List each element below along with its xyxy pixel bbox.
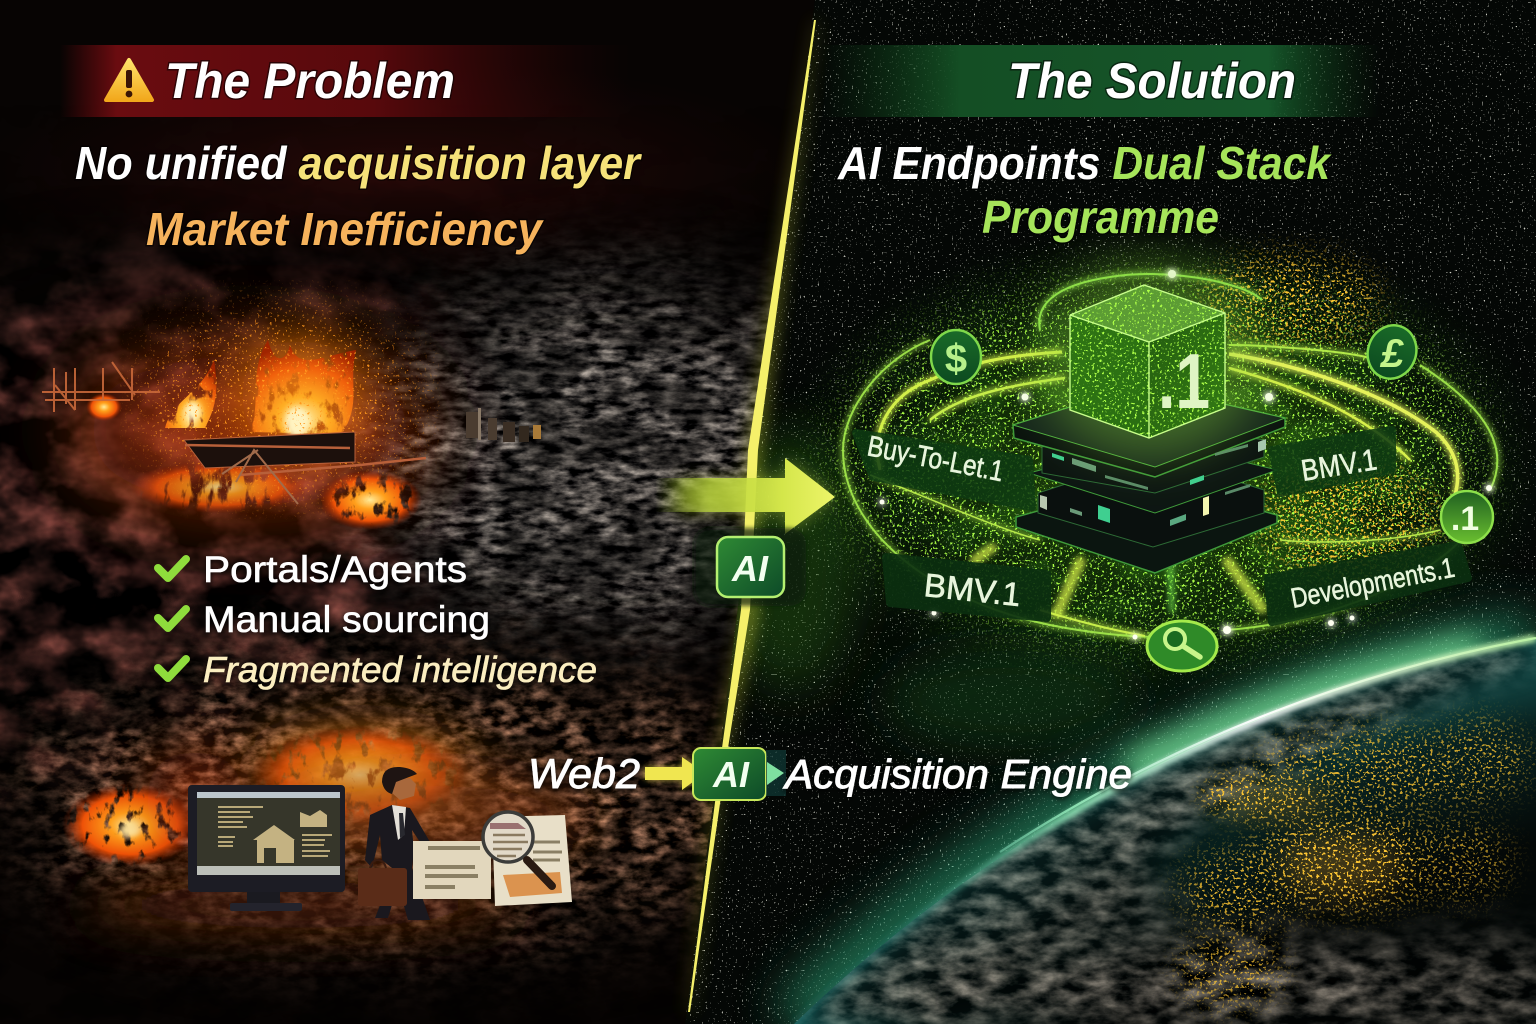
icon: warning triangle [106, 60, 152, 100]
subheading: AI endpoints dual stack: AI Endpoints Dual Stack [837, 137, 1332, 189]
icon: magnifier [1147, 621, 1217, 671]
arrow: AI to engine [766, 750, 786, 796]
icon: .1 badge: .1 [1451, 500, 1479, 538]
checklist [158, 549, 597, 690]
cube label: .1 [1158, 337, 1210, 425]
icon: pound coin: £ [1380, 332, 1404, 376]
planet [790, 630, 1536, 1024]
arrow: web2 to AI [645, 757, 705, 790]
burning platform [184, 432, 426, 504]
icon: businessman [358, 767, 448, 920]
arrow: problem to solution [655, 458, 835, 534]
divider line [688, 20, 817, 1012]
panel: solution background [680, 0, 1536, 1024]
pill: Developments.1: Developments.1 [1288, 552, 1457, 614]
icon: dollar coin: $ [945, 337, 967, 381]
heading: The Solution: The Solution [1008, 53, 1296, 109]
icon: AI chip small [693, 748, 766, 800]
subheading: market inefficiency: Market Inefficiency [146, 203, 544, 255]
icon: documents with magnifier [413, 812, 572, 906]
item: manual sourcing: Manual sourcing [203, 599, 490, 640]
label: Acquisition Engine: Acquisition Engine [782, 751, 1132, 797]
green sparkle cloud [760, 220, 1536, 680]
icon: AI chip large [694, 528, 806, 606]
heading band: problem [60, 45, 630, 117]
icon: AI chip small: AI [712, 754, 750, 795]
icon: .1 badge [1441, 491, 1493, 543]
orbit rings [843, 274, 1497, 637]
burning scaffold [42, 362, 160, 412]
light beams under stack [975, 548, 1262, 612]
subheading: programme: Programme [982, 191, 1219, 243]
server stack [1013, 385, 1285, 573]
pill: Buy-To-Let.1: Buy-To-Let.1 [865, 430, 1006, 488]
heading: The Problem: The Problem [165, 53, 455, 109]
panel: problem background [0, 102, 774, 1006]
icon: monitor [188, 785, 345, 911]
server panels [1040, 439, 1266, 526]
orbit nodes [880, 270, 1492, 640]
subheading: no unified acquisition layer: No unified acquisition layer [75, 137, 642, 189]
glowing cube [1040, 265, 1260, 455]
icon: dollar coin [931, 330, 981, 384]
icon: AI chip large: AI [731, 548, 769, 589]
pill: BMV.1 right: BMV.1 [1299, 443, 1379, 488]
label: Web2: Web2 [528, 750, 640, 797]
item: fragmented intelligence: Fragmented intelligence [203, 649, 597, 690]
item: portals/agents: Portals/Agents [203, 549, 467, 590]
heading band: solution [820, 45, 1380, 117]
distant buildings [466, 408, 541, 442]
gold sparkle cloud [1183, 232, 1452, 584]
pill: BMV.1 left [886, 557, 1047, 618]
diagram: AI endpoints hub [843, 265, 1497, 671]
icon: pound coin [1360, 318, 1424, 386]
pill: BMV.1 left: BMV.1 [922, 566, 1023, 613]
pill: BMV.1 right [1272, 430, 1392, 493]
